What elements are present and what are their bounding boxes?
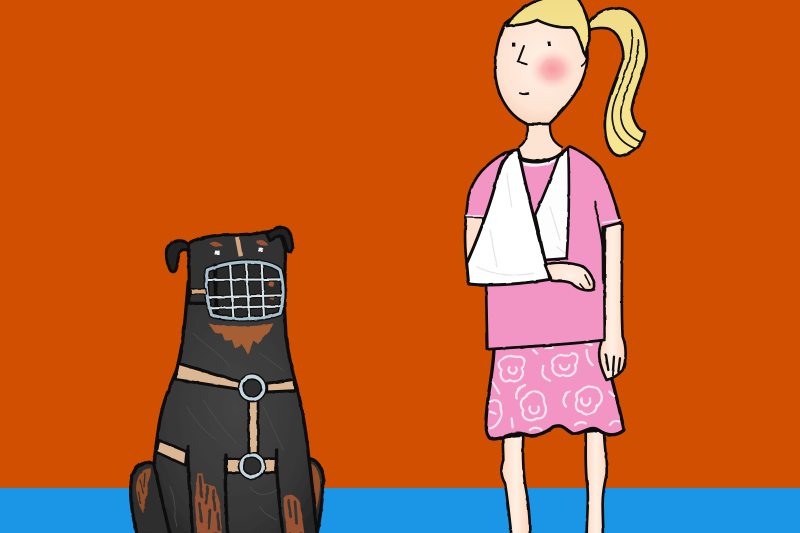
dog harness: [156, 363, 296, 477]
harness lower strap: [227, 459, 276, 473]
cheek blush: [529, 49, 577, 90]
dog head: [166, 227, 293, 303]
girl front arm: [599, 223, 626, 380]
dog muzzle strap: [191, 289, 206, 294]
dog eyes: [215, 248, 263, 255]
dog forehead stripe: [235, 237, 243, 257]
girl neck: [519, 122, 562, 162]
skirt flower pattern: [490, 343, 619, 430]
harness vertical strap: [249, 400, 258, 453]
background: blue floor: [0, 488, 800, 533]
girl hair fringe: [507, 0, 589, 57]
harness collar strap: [175, 363, 296, 392]
harness side strap: [156, 440, 187, 465]
dog body: [154, 282, 317, 533]
girl eyes: [512, 42, 551, 47]
girl hand on sling: [545, 263, 595, 290]
dog fur texture: [170, 333, 283, 527]
girl legs: [501, 430, 607, 533]
dog haunches: [131, 458, 323, 533]
girl ponytail: [588, 8, 647, 156]
girl: [465, 0, 647, 533]
girl shirt hem: [486, 270, 605, 349]
girl nose: [518, 46, 527, 64]
girl sling: [467, 147, 569, 285]
dog front legs: [188, 447, 283, 533]
dog chest tan patch: [208, 323, 273, 355]
dog left ear: [166, 241, 189, 272]
girl skirt: [486, 340, 624, 439]
dog: [131, 227, 323, 533]
girl shirt: [466, 147, 621, 290]
dog brows: [210, 240, 268, 246]
harness lower ring: [241, 455, 263, 477]
girl ear: [582, 50, 587, 66]
dog muzzle cage: [206, 262, 283, 319]
dog right ear: [267, 227, 293, 252]
dog tan leg markings: [195, 473, 304, 533]
girl back arm: [465, 217, 483, 263]
girl mouth: [520, 90, 529, 97]
girl head: [495, 0, 589, 124]
harness upper ring: [241, 377, 264, 399]
